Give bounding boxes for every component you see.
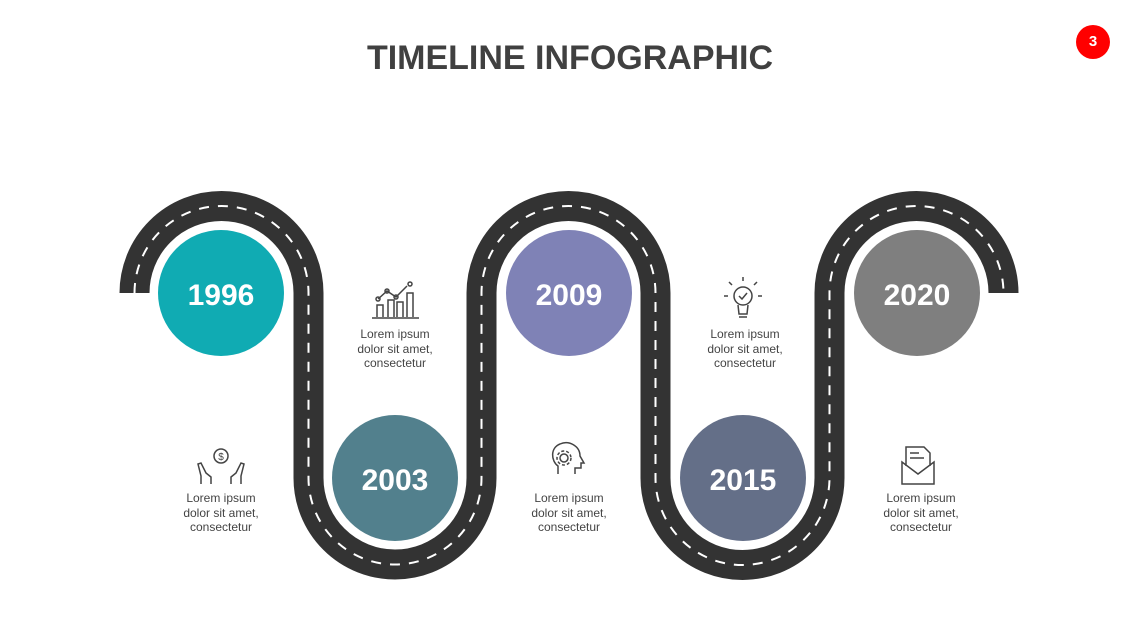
circle 2020: 2020 [884, 279, 950, 312]
text: item 4 top: dolor sit amet, [707, 342, 783, 356]
icon: head with gear [553, 443, 584, 474]
circle 2009 [506, 230, 632, 356]
text: item 2 top: dolor sit amet, [357, 342, 433, 356]
icon: chart [372, 282, 419, 318]
text: item 3 bottom: dolor sit amet, [531, 506, 607, 520]
circle 2003: 2003 [362, 464, 428, 497]
text: item 4 top: consectetur [714, 356, 776, 370]
text: item 1 bottom: consectetur [190, 520, 252, 534]
circle 1996 [158, 230, 284, 356]
title: TIMELINE INFOGRAPHIC [367, 39, 773, 77]
circle 2015 [680, 415, 806, 541]
text: item 2 top [357, 327, 433, 370]
circle 1996: 1996 [188, 279, 254, 312]
badge: page number: 3 [1089, 33, 1097, 50]
circle 2015: 2015 [710, 464, 776, 497]
icon: hands with dollar: $ [218, 452, 224, 463]
text: item 5 bottom: consectetur [890, 520, 952, 534]
text: item 2 top: Lorem ipsum [360, 327, 430, 341]
circle 2020 [854, 230, 980, 356]
text: item 3 bottom: Lorem ipsum [534, 491, 604, 505]
text: item 5 bottom: dolor sit amet, [883, 506, 959, 520]
text: item 5 bottom: Lorem ipsum [886, 491, 956, 505]
text: item 4 top: Lorem ipsum [710, 327, 780, 341]
text: item 1 bottom: dolor sit amet, [183, 506, 259, 520]
icon: lightbulb [724, 277, 762, 317]
text: item 5 bottom [883, 491, 959, 534]
text: item 1 bottom: Lorem ipsum [186, 491, 256, 505]
circle 2009: 2009 [536, 279, 602, 312]
circle 2003 [332, 415, 458, 541]
text: item 4 top [707, 327, 783, 370]
icon: hands with dollar [198, 449, 244, 484]
text: item 3 bottom [531, 491, 607, 534]
text: item 3 bottom: consectetur [538, 520, 600, 534]
text: item 1 bottom [183, 491, 259, 534]
icon: envelope with document [902, 447, 934, 484]
text: item 2 top: consectetur [364, 356, 426, 370]
badge: page number [1076, 25, 1110, 59]
